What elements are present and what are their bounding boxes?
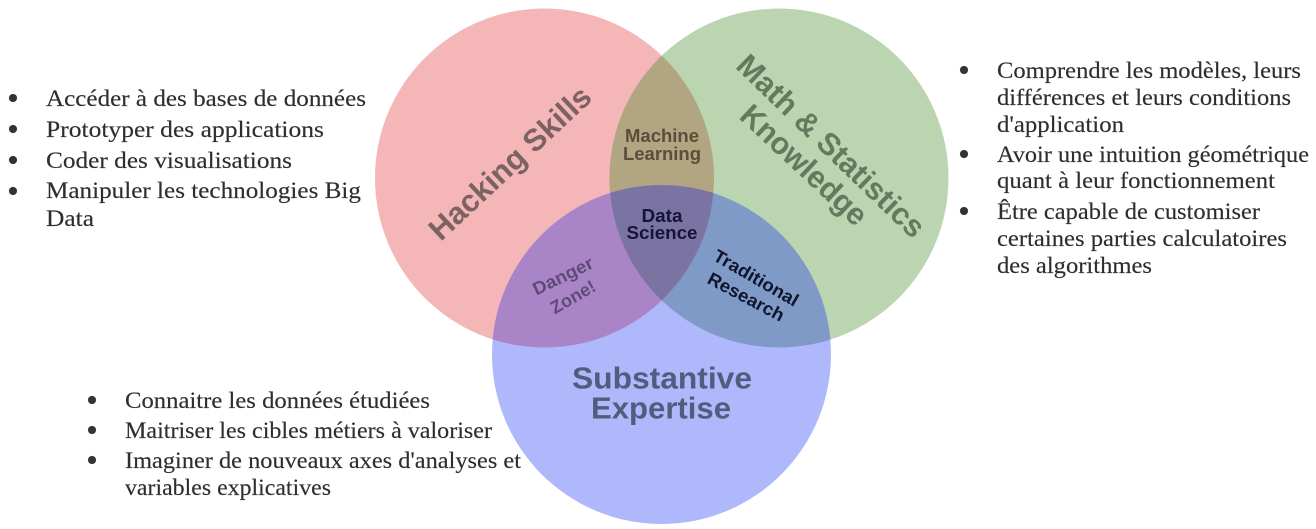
item 2: Maitriser les cibles métiers à valoriser [125,418,492,444]
item 3 [997,199,1287,279]
item 1 [997,58,1301,138]
item 4: Manipuler les technologies Big [46,178,361,204]
item 1: Accéder à des bases de données [46,86,366,112]
bullet 1 [88,396,96,404]
label: substantive: Substantive [572,360,752,396]
item 2: quant à leur fonctionnement [997,168,1275,194]
bullet 2 [88,426,96,434]
bullet 1 [9,94,17,102]
label: hacking skills: Hacking Skills [422,79,598,247]
item 3: variables explicatives [125,475,331,501]
bullet 3 [960,207,968,215]
bullet 4 [9,187,17,195]
item 4 [46,178,361,232]
circle: substantive expertise [492,185,831,524]
label: learning: Learning [623,144,701,164]
label: expertise: Expertise [591,390,731,426]
circle: hacking skills [375,8,714,348]
item 3: Coder des visualisations [46,148,292,174]
bullet 1 [960,66,968,74]
list: substantive expertise [88,388,521,501]
item 1: d'application [997,112,1124,138]
bullet 3 [9,156,17,164]
label: knowledge: Knowledge [733,97,875,233]
overlap: traditional research [610,185,830,348]
circle: math and statistics [610,8,948,348]
overlap: machine learning [610,56,714,193]
item 2 [997,142,1309,194]
bullet 2 [9,125,17,133]
label: research: Research [704,268,788,326]
label: math and statistics: Math & Statistics [730,47,932,245]
item 3: Être capable de customiser [997,199,1260,225]
item 3: certaines parties calculatoires [997,226,1287,252]
bullet 2 [960,150,968,158]
item 1: différences et leurs conditions [997,85,1291,111]
label: traditional: Traditional [710,246,802,310]
item 4: Data [46,206,95,232]
venn diagram [375,8,948,524]
label: zone: Zone! [547,276,599,318]
item 3 [125,448,521,501]
label: danger: Danger [529,253,597,299]
item 1: Connaitre les données étudiées [125,388,430,414]
item 3: Imaginer de nouveaux axes d'analyses et [125,448,521,474]
item 1: Comprendre les modèles, leurs [997,58,1301,84]
item 2: Avoir une intuition géométrique [997,142,1309,168]
item 3: des algorithmes [997,253,1152,279]
list: hacking skills [9,86,366,232]
bullet 3 [88,456,96,464]
label: machine: Machine [625,126,699,146]
label: data: Data [642,206,684,226]
label: science: Science [626,223,698,243]
overlap: danger zone [492,185,713,348]
item 2: Prototyper des applications [46,117,324,143]
overlap: data science [610,185,714,300]
list: math and statistics [960,58,1309,279]
